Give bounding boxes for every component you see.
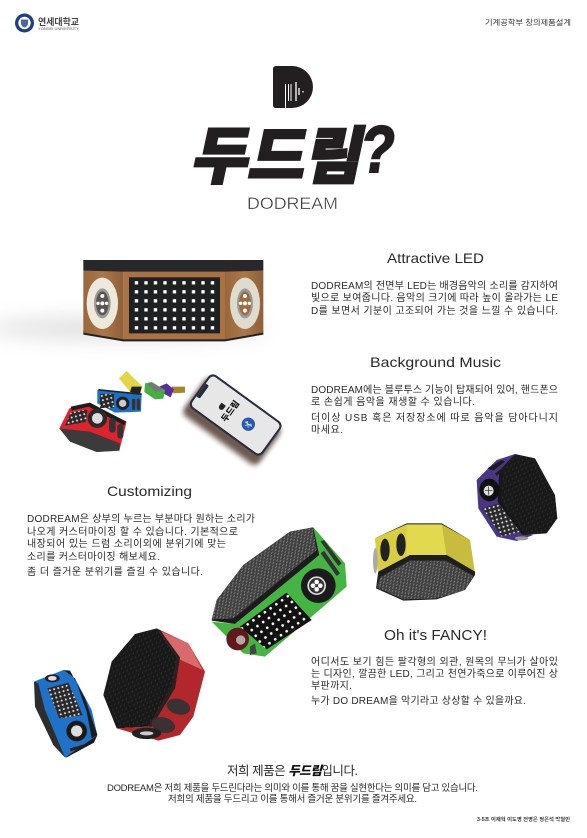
product: row of small speakers: [59, 371, 185, 452]
gold speaker: [172, 387, 185, 393]
LED matrix: [129, 277, 220, 333]
body: [212, 527, 347, 657]
text block: Oh it's FANCY!: [311, 656, 558, 707]
subtitle: DODREAM: [247, 194, 338, 213]
text block: Oh it's FANCY!: 는 디자인, 깔끔한 LED, 그리고 천연가죽으로 이루어진 상: [311, 668, 558, 680]
rim: [212, 527, 319, 624]
left ring: [87, 278, 118, 329]
speaker base: [83, 331, 263, 341]
text block: Attractive LED: [311, 279, 558, 317]
product: green speaker: [212, 527, 347, 657]
speaker: [301, 568, 336, 603]
product: wood speaker: [0, 260, 267, 341]
text block: Customizing: DODREAM은 상부의 누르는 부분마다 원하는 소리가: [27, 512, 255, 525]
course label: 기계공학부 창의제품설계: [485, 17, 571, 27]
top band: [83, 260, 263, 272]
red button: [226, 628, 249, 650]
slots: [321, 540, 342, 566]
product: red speaker: [103, 628, 205, 741]
blue speaker: [97, 390, 142, 413]
text block: Background Music: 더이상 USB 혹은 저장장소에 따로 음악을 담아다니지: [311, 411, 558, 424]
heading: Customizing: Customizing: [107, 483, 192, 499]
text block: Background Music: 로 손쉽게 음악을 재생할 수 있습니다.: [311, 396, 475, 408]
logo: Yonsei University: [15, 14, 80, 32]
side panels: [83, 271, 123, 339]
green speaker: [144, 382, 165, 399]
purple speaker: [159, 383, 174, 397]
closing heading: 저희 제품은 두드림입니다.: [227, 764, 358, 778]
phone name: 두드림: [218, 398, 241, 424]
product: blue speaker: [34, 670, 97, 757]
text block: Customizing: [27, 512, 255, 578]
icon: D sound logo: [273, 66, 313, 108]
closing text: 저희의 제품을 두드리고 이를 통해서 즐거운 분위기를 즐겨주세요.: [168, 793, 417, 805]
text block: Background Music: DODREAM에는 블루투스 기능이 탑재되어 있어, 핸드폰으: [311, 384, 558, 396]
text block: Oh it's FANCY!: 누가 DO DREAM을 악기라고 상상할 수 있을까요.: [311, 695, 526, 707]
heading: Oh it's FANCY!: Oh it's FANCY!: [384, 627, 487, 644]
text block: Attractive LED: 빛으로 보여줍니다. 음악의 크기에 따라 높이 올라가는 LE: [311, 292, 558, 304]
red speaker: [59, 403, 127, 452]
yellow speaker: [119, 371, 143, 394]
phone logo: [218, 403, 226, 411]
text block: Customizing: 나오게 커스터마이징 할 수 있습니다. 기본적으로: [27, 526, 238, 538]
text block: Background Music: 마세요.: [311, 424, 343, 436]
product: purple speaker: [477, 454, 557, 541]
title: 두드림: [187, 123, 372, 192]
text block: Oh it's FANCY!: 어디서도 보기 힘든 팔각형의 외관, 원목의 무늬가 살아있: [311, 656, 558, 668]
text block: Customizing: 좀 더 즐거운 분위기를 즐길 수 있습니다.: [27, 565, 203, 578]
text block: Customizing: 소리를 커스터마이징 해보세요.: [27, 550, 160, 563]
heading: Attractive LED: Attractive LED: [387, 250, 484, 266]
carbon top: [212, 527, 317, 619]
text block: Oh it's FANCY!: 부판까지.: [311, 680, 352, 692]
closing text: [107, 782, 478, 805]
phone bluetooth badge: [239, 415, 258, 434]
shadow: [0, 318, 267, 338]
text block: Attractive LED: DODREAM의 전면부 LED는 배경음악의 소리를 감지하여: [311, 279, 558, 292]
right ring: [230, 278, 260, 329]
text block: Attractive LED: D를 보면서 기분이 고조되어 가는 것을 느낄 수 있습니다.: [311, 305, 558, 317]
logo: Yonsei University: 연세대학교: [38, 16, 79, 27]
front panel: [123, 271, 225, 339]
phone: [181, 371, 286, 467]
text block: Customizing: 내장되어 있는 드럼 소리이외에 분위기에 맞는: [27, 537, 226, 550]
team credits: 3-5조 이재혁 이도영 전영은 정은석 박철민: [477, 816, 570, 823]
text block: Background Music: [311, 384, 558, 436]
title: ?: [356, 113, 400, 187]
closing text: DODREAM은 저희 제품을 두드린다라는 의미와 이를 통해 꿈을 실현한다는 의미를 담고 있습니다.: [107, 782, 478, 794]
LED matrix: [240, 593, 312, 649]
product: yellow speaker: [373, 523, 475, 601]
heading: Background Music: Background Music: [370, 354, 501, 370]
logo: Yonsei University: YONSEI UNIVERSITY: [38, 27, 80, 31]
